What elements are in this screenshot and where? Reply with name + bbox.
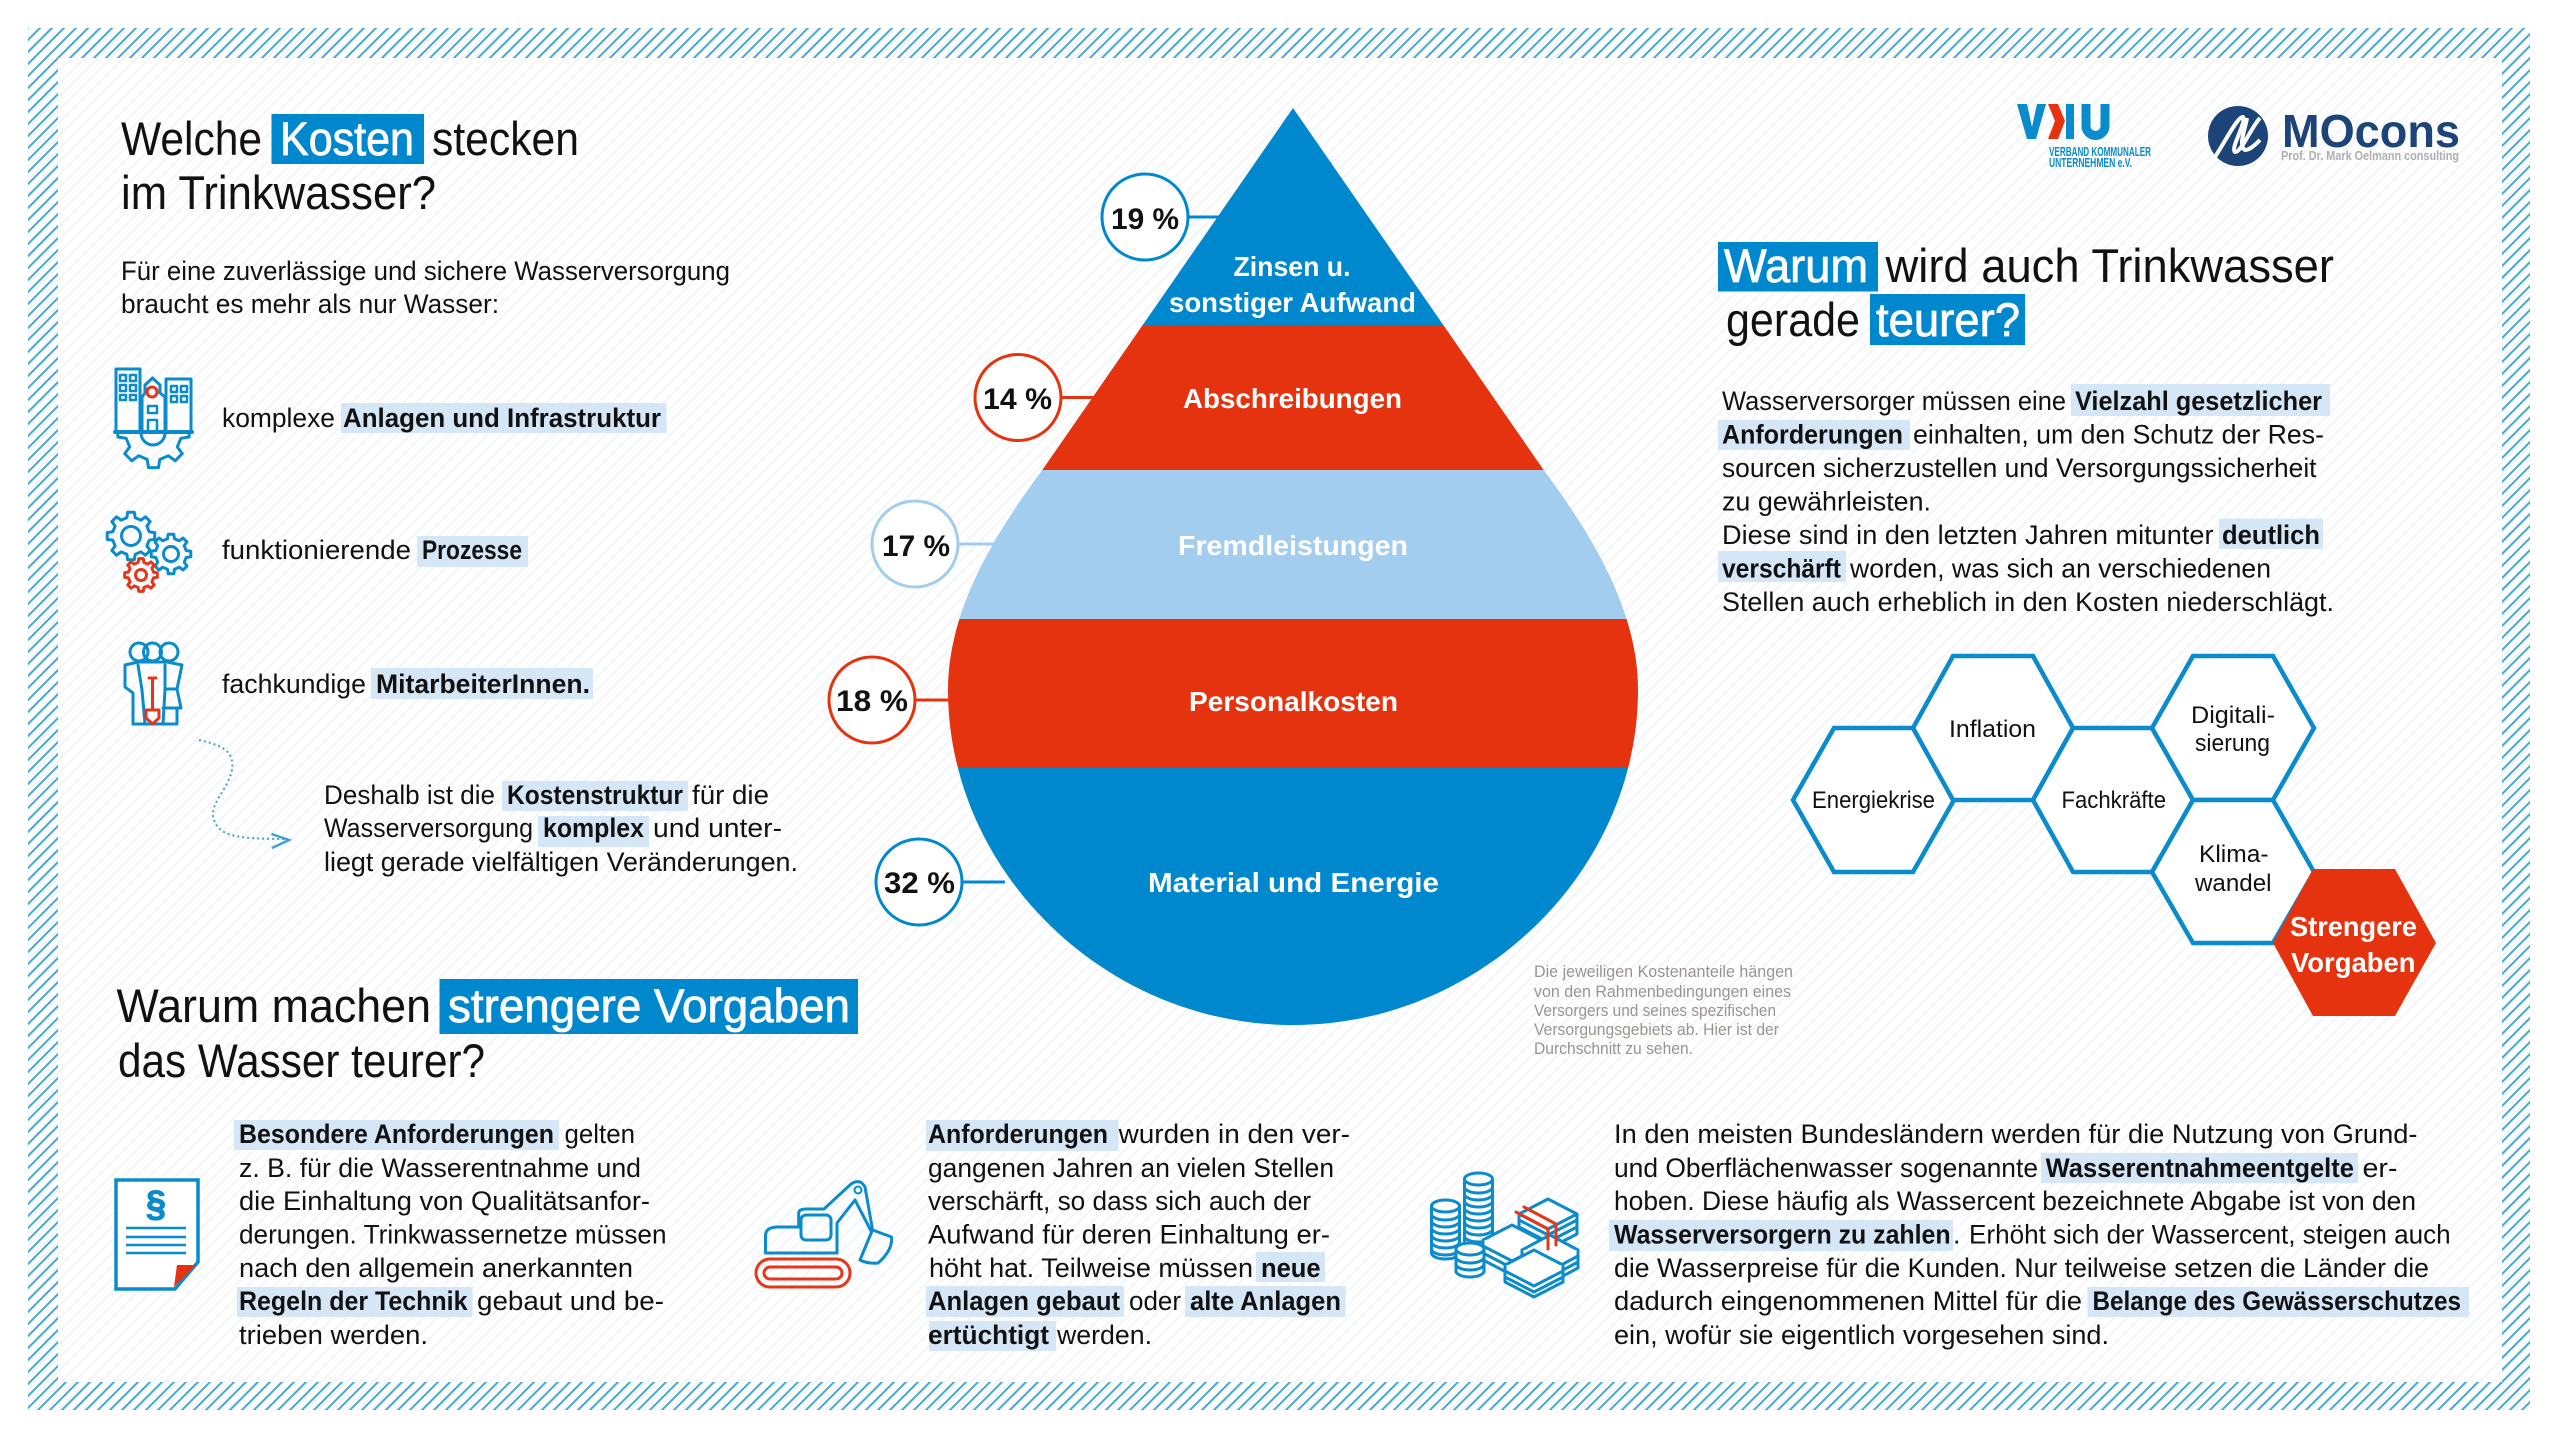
heading: Welche Kosten stecken: im Trinkwasser? [121, 166, 436, 219]
percent badge 18 [829, 657, 915, 743]
drop layers [948, 108, 1638, 1025]
connector lines [912, 217, 1225, 882]
percent badge 19: 19 % [1111, 203, 1179, 236]
layer labels: Personalkosten [1189, 686, 1398, 717]
text: Anforderungen wurden [926, 1119, 1350, 1351]
icon: staff [125, 643, 182, 724]
hex: Inflation [1913, 656, 2073, 800]
text: Anforderungen [1718, 384, 2334, 617]
text: Anforderungen: Stellen auch erheblich in den Kosten niederschlägt. [1722, 587, 2334, 617]
percent badge 19 [1102, 174, 1188, 260]
percent badge 14: 14 % [983, 383, 1052, 416]
text: Besondere Anforderungen: z. B. für die Wasserentnahme und [239, 1153, 641, 1183]
text: Besondere Anforderungen: nach den allgemein anerkannten [239, 1253, 633, 1283]
text: Anforderungen wurden: wurden in den ver- [1118, 1119, 1350, 1149]
text: Wasserentnahmeentgelte [1609, 1119, 2469, 1350]
logo: VKU: VERBAND KOMMUNALER [2049, 144, 2151, 159]
heading: Warum wird auch Trinkwasser: teurer? [1876, 293, 2020, 346]
hex: Strengere Vorgaben: Strengere [2290, 911, 2417, 942]
money bundle back right [1519, 1199, 1577, 1249]
text: Anforderungen wurden: neue [1261, 1253, 1321, 1283]
text: Anforderungen: deutlich [2222, 520, 2320, 550]
text: Wasserentnahmeentgelte: . [1953, 1220, 1961, 1250]
text: Wasserentnahmeentgelte: Wasserentnahmeentgelte [2046, 1153, 2354, 1183]
text: Wasserentnahmeentgelte: hoben. Diese häufig als Wassercent bezeichnete Abgabe ist von den [1614, 1186, 2416, 1216]
text: Anforderungen wurden: Aufwand für deren Einhaltung er- [928, 1220, 1330, 1250]
footnote [1534, 963, 1793, 1058]
item: MitarbeiterInnen: fachkundige [222, 669, 366, 699]
text: Besondere Anforderungen: derungen. Trinkwassernetze müssen [239, 1220, 666, 1250]
hex: Digitalisierung [2152, 656, 2314, 800]
heading: Warum machen strengere Vorgaben: Warum machen [116, 979, 431, 1032]
footnote: Durchschnitt zu sehen. [1534, 1040, 1693, 1058]
text: Anforderungen wurden: Anlagen gebaut [928, 1286, 1120, 1316]
hex: Energiekrise [1793, 728, 1954, 872]
text: Besondere Anforderungen [234, 1119, 666, 1350]
item: Anlagen und Infrastruktur: Anlagen und Infrastruktur [343, 403, 661, 433]
hex: Digitalisierung: sierung [2195, 730, 2270, 757]
percent badge 18: 18 % [836, 685, 908, 718]
text: Anforderungen: Diese sind in den letzten Jahren mitunter [1722, 520, 2214, 550]
percent badge 14 [975, 354, 1061, 440]
hex: Fachkräfte [2033, 728, 2193, 872]
icon: excavator [756, 1182, 892, 1287]
hex: Inflation: Inflation [1949, 716, 2036, 743]
money strap [1516, 1207, 1556, 1249]
logo: MOcons: Prof. Dr. Mark Oelmann consulting [2281, 148, 2459, 163]
text: Anforderungen: einhalten, um den Schutz der Res- [1913, 420, 2324, 450]
heading: Warum wird auch Trinkwasser: gerade [1726, 293, 1860, 346]
money bundle left [1483, 1225, 1541, 1275]
intro text: braucht es mehr als nur Wasser: [121, 289, 499, 319]
hex: Klimawandel: Klima- [2199, 841, 2268, 868]
heading: Warum machen strengere Vorgaben: das Wasser teurer? [118, 1034, 485, 1087]
text: Anforderungen wurden: Anforderungen [928, 1119, 1108, 1149]
text: Wasserentnahmeentgelte: dadurch eingenommenen Mittel für die [1614, 1286, 2082, 1316]
text: Besondere Anforderungen: trieben werden. [239, 1320, 428, 1350]
hex: Digitalisierung: Digitali- [2191, 702, 2275, 729]
intro text [121, 256, 730, 319]
percent badge 32: 32 % [884, 867, 955, 900]
text: Wasserentnahmeentgelte: In den meisten Bundesländern werden für die Nutzung von Grund- [1614, 1119, 2418, 1149]
footnote: Die jeweiligen Kostenanteile hängen [1534, 963, 1793, 981]
layer labels: Abschreibungen [1183, 383, 1402, 414]
text: Kostenstruktur: für die [692, 780, 769, 810]
text: Anforderungen: zu gewährleisten. [1722, 486, 1931, 516]
text: Anforderungen wurden: oder [1129, 1286, 1181, 1316]
hex: Strengere Vorgaben: Vorgaben [2291, 947, 2416, 978]
text: Wasserentnahmeentgelte: Erhöht sich der Wassercent, steigen auch [1969, 1220, 2451, 1250]
text: Besondere Anforderungen: Regeln der Technik [239, 1286, 468, 1316]
arrow: dotted [199, 740, 289, 848]
item: Prozesse: Prozesse [422, 535, 522, 565]
heading: Welche Kosten stecken: Welche [121, 112, 262, 165]
item: Prozesse: funktionierende [222, 535, 411, 565]
text: Kostenstruktur: liegt gerade vielfältigen Veränderungen. [324, 847, 798, 877]
text: Anforderungen: verschärft [1722, 554, 1841, 584]
logo: VKU: UNTERNEHMEN e.V. [2049, 155, 2132, 170]
footnote: Versorgers und seines spezifischen [1534, 1002, 1776, 1020]
text: Wasserentnahmeentgelte: Belange des Gewässerschutzes [2092, 1286, 2461, 1316]
text: Wasserentnahmeentgelte: und Oberflächenwasser sogenannte [1614, 1153, 2038, 1183]
text: Anforderungen wurden: ertüchtigt [928, 1320, 1049, 1350]
item: Anlagen und Infrastruktur: komplexe [222, 403, 335, 433]
text: Kostenstruktur: komplex [543, 813, 644, 843]
text: Anforderungen wurden: werden. [1056, 1320, 1152, 1350]
intro text: Für eine zuverlässige und sichere Wasserversorgung [121, 256, 730, 286]
heading: Warum machen strengere Vorgaben: strengere Vorgaben [448, 979, 850, 1032]
footnote: Versorgungsgebiets ab. Hier ist der [1534, 1021, 1779, 1039]
panel: Warum teurer [1718, 239, 2436, 1016]
heading: Welche Kosten stecken [121, 112, 579, 219]
icon: gears [107, 512, 191, 591]
coin stack tall [1464, 1173, 1492, 1242]
logo: MOcons: MOcons [2282, 105, 2460, 157]
text: Kostenstruktur: Deshalb ist die [324, 780, 495, 810]
money bundle front [1505, 1250, 1563, 1297]
hex: Fachkräfte: Fachkräfte [2062, 787, 2166, 814]
coin stack front [1456, 1243, 1484, 1277]
layer labels: sonstiger Aufwand [1169, 287, 1416, 318]
text: Anforderungen: Anforderungen [1722, 420, 1903, 450]
heading: Warum machen strengere Vorgaben [116, 979, 858, 1087]
text: Besondere Anforderungen: gebaut und be- [477, 1286, 664, 1316]
heading: Warum wird auch Trinkwasser: wird auch Trinkwasser [1885, 239, 2334, 292]
text: Wasserentnahmeentgelte: er- [2362, 1153, 2398, 1183]
panel: strengere Vorgaben [116, 979, 2469, 1351]
text: Anforderungen: Wasserversorger müssen eine [1722, 386, 2066, 416]
footnote: von den Rahmenbedingungen eines [1534, 983, 1791, 1001]
layer labels: Zinsen u. [1234, 251, 1350, 282]
text: Anforderungen: worden, was sich an verschiedenen [1849, 554, 2271, 584]
heading: Warum wird auch Trinkwasser: Warum [1724, 239, 1868, 292]
text: Kostenstruktur [324, 780, 798, 877]
hex: Strengere Vorgaben [2273, 869, 2436, 1016]
hex: Klimawandel: wandel [2194, 870, 2272, 897]
layer labels [1148, 251, 1439, 898]
text: Wasserentnahmeentgelte: ein, wofür sie eigentlich vorgesehen sind. [1614, 1320, 2109, 1350]
percent badge 17: 17 % [882, 530, 950, 563]
item: Prozesse [222, 535, 528, 567]
chart: water drop cost shares [829, 100, 1700, 1028]
text: Anforderungen: Vielzahl gesetzlicher [2075, 386, 2322, 416]
hex: Energiekrise: Energiekrise [1812, 787, 1935, 814]
item: MitarbeiterInnen: MitarbeiterInnen. [376, 669, 590, 699]
layer labels: Fremdleistungen [1178, 530, 1408, 561]
text: Anforderungen: sourcen sicherzustellen und Versorgungssicherheit [1722, 453, 2317, 483]
hex: Klimawandel [2152, 800, 2314, 943]
heading: Welche Kosten stecken: Kosten [280, 112, 414, 165]
text: Besondere Anforderungen: gelten [564, 1119, 635, 1149]
coin stack left [1432, 1200, 1460, 1259]
text: Anforderungen wurden: alte Anlagen [1190, 1286, 1341, 1316]
text: Anforderungen wurden: höht hat. Teilweise müssen [929, 1253, 1253, 1283]
text: Kostenstruktur: Kostenstruktur [507, 780, 683, 810]
icon: legal document: § [146, 1183, 166, 1224]
text: Anforderungen wurden: verschärft, so dass sich auch der [928, 1186, 1311, 1216]
heading: Warum wird auch Trinkwasser [1718, 239, 2334, 346]
panel: Welche Kosten [107, 112, 798, 877]
icon: coins and money [1432, 1173, 1578, 1297]
text: Besondere Anforderungen: Besondere Anforderungen [239, 1119, 554, 1149]
logo: MOcons [2208, 105, 2460, 166]
text: Wasserentnahmeentgelte: die Wasserpreise für die Kunden. Nur teilweise setzen die Länder die [1614, 1253, 2429, 1283]
hexagon cluster [1793, 656, 2436, 1016]
heading: Welche Kosten stecken: stecken [432, 112, 579, 165]
icon: buildings on gear [115, 369, 192, 468]
text: Wasserentnahmeentgelte: Wasserversorgern zu zahlen [1614, 1220, 1951, 1250]
money bundle right [1522, 1235, 1578, 1283]
logo: VKU [2017, 104, 2151, 170]
icon: legal document [116, 1180, 198, 1289]
text: Kostenstruktur: und unter- [653, 813, 782, 843]
item: MitarbeiterInnen [222, 668, 593, 699]
text: Anforderungen wurden: gangenen Jahren an vielen Stellen [928, 1153, 1334, 1183]
percent badge 17 [872, 501, 958, 587]
layer labels: Material und Energie [1148, 867, 1439, 898]
text: Besondere Anforderungen: die Einhaltung von Qualitätsanfor- [239, 1186, 650, 1216]
percent badge 32 [876, 839, 962, 925]
text: Kostenstruktur: Wasserversorgung [324, 813, 533, 843]
